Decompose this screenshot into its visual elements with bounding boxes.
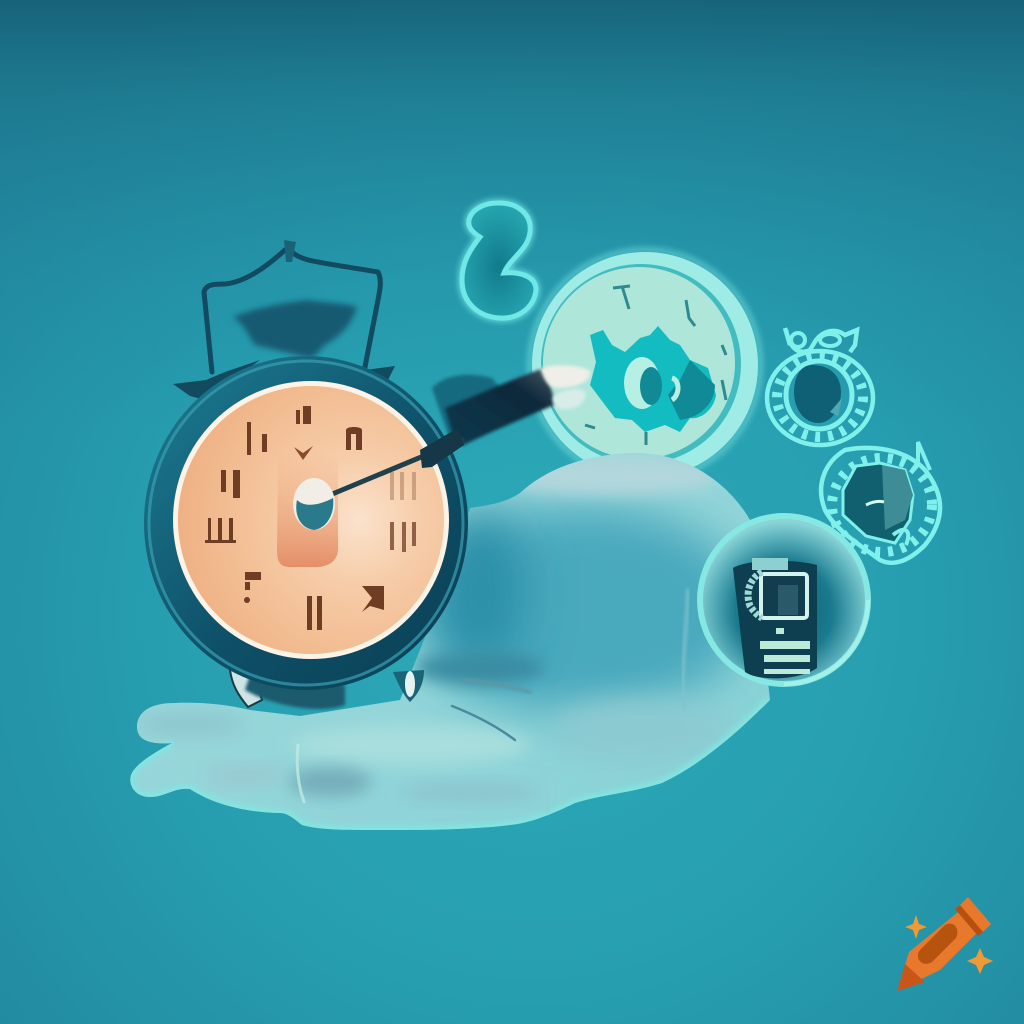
- icon: glowing figure-eight symbol: [462, 203, 536, 318]
- icon: outlined ring badge top right: [767, 328, 873, 445]
- clock numerals: [205, 406, 416, 630]
- icon: watch in bubble on fingertip: [699, 515, 869, 685]
- icon: teal globe dial: [530, 250, 760, 480]
- icon: outlined ring badge lower right: [821, 442, 940, 563]
- open hand: [130, 453, 770, 830]
- watch strap bars: [760, 628, 810, 674]
- clock hand: [330, 440, 462, 495]
- clock body: [144, 356, 468, 690]
- clock ear bells: [173, 360, 260, 400]
- face centre highlight: [277, 452, 338, 567]
- clock feet: [230, 668, 424, 709]
- icon: dark pointing arm with fingers: [432, 365, 590, 446]
- dial tick marks: [585, 286, 726, 445]
- hand edge glow: [130, 700, 770, 830]
- palm creases: [297, 590, 688, 812]
- clock hub: [293, 478, 335, 530]
- alarm clock: [144, 240, 468, 709]
- logo: crayon: [897, 897, 993, 991]
- hand shading layers: [130, 455, 770, 830]
- finger tips: [540, 365, 590, 388]
- clock face: [173, 381, 449, 659]
- globe continent blob: [590, 326, 716, 432]
- badge crown: [785, 328, 857, 352]
- clock handle: [204, 250, 380, 372]
- watch body: [733, 561, 817, 678]
- clock hammer: [233, 300, 357, 358]
